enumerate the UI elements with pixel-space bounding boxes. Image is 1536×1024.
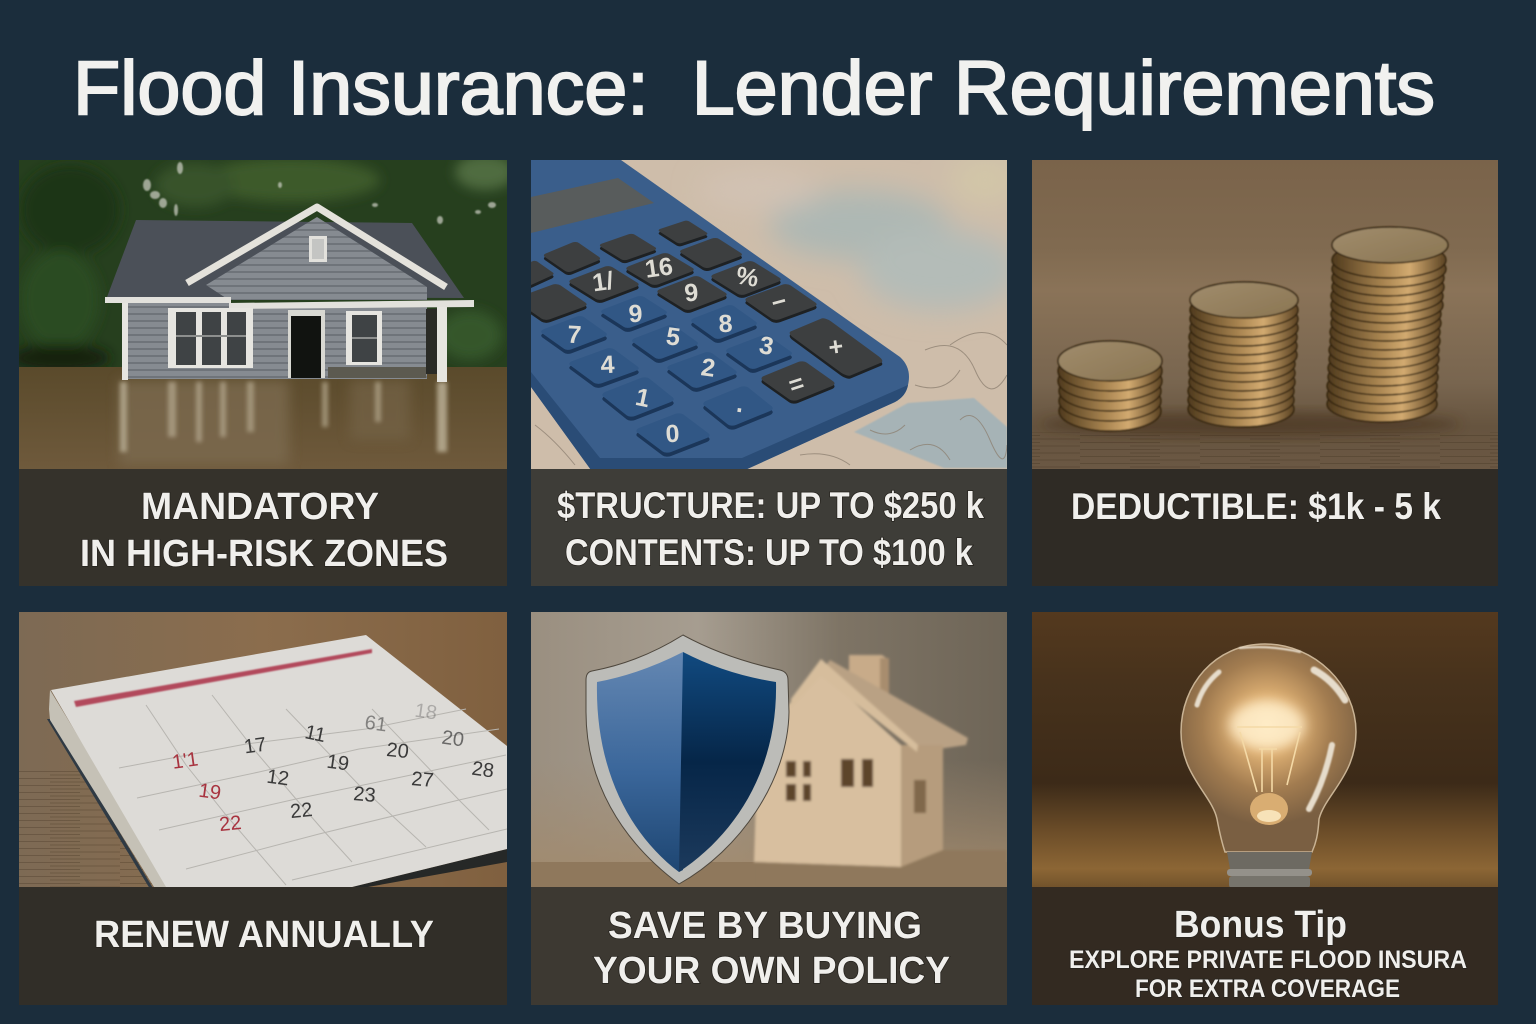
key labels: − [768,287,790,318]
caption text: YOUR OWN POLICY [593,950,950,992]
calendar dates: 17 [243,734,268,758]
key labels: 9 [628,300,643,328]
calculator display [531,178,654,233]
small coin stack [1058,341,1162,431]
icon: calendar [47,635,507,905]
key labels: % [734,261,761,293]
key labels: 8 [718,310,733,338]
panel: coverage limits [509,155,1020,586]
medium coin stack [1188,282,1298,427]
key labels: 2 [699,353,717,383]
panel: save by buying your own policy [531,612,1007,1005]
key labels: . [735,390,746,418]
caption text: RENEW ANNUALLY [94,914,434,956]
caption text: FOR EXTRA COVERAGE [1135,975,1400,1003]
calendar dates: 27 [410,768,435,792]
key labels: 0 [665,420,680,448]
calendar dates: 19 [197,780,222,804]
bulb screw base [1227,852,1312,888]
caption band [531,469,1007,586]
panel: renew annually [19,612,507,1005]
calendar dates: 11 [303,721,328,747]
panel: bonus tip [1032,612,1498,1005]
photo: warm background [1032,612,1498,888]
key labels: 7 [567,321,582,349]
calendar dates: 22 [289,799,314,823]
caption text: EXPLORE PRIVATE FLOOD INSURA [1069,946,1467,974]
caption text [592,910,951,984]
caption band [1032,887,1498,1005]
icon: house [105,207,474,382]
calendar grid [119,695,507,885]
icon: shield [586,635,789,884]
key labels: 4 [600,351,615,379]
calendar dates [171,700,495,836]
calendar dates: 18 [413,700,438,724]
calendar dates: 28 [470,758,495,782]
calendar dates: 22 [218,812,243,836]
photo: map background [531,155,1020,470]
photo: trees and flood water [10,154,515,470]
blue number keys [539,295,794,458]
panel: mandatory in high-risk zones [10,154,515,586]
caption band [531,887,1007,1005]
tall coin stack [1327,227,1448,422]
caption text: DEDUCTIBLE: $1k - 5 k [1071,486,1441,527]
dark function keys [509,220,885,405]
icon: light bulb [1181,644,1356,888]
key labels: = [785,369,808,400]
icon: coin stacks [1040,227,1460,436]
caption text: Bonus Tip [1174,904,1347,946]
caption text: IN HIGH-RISK ZONES [80,533,448,575]
caption text [557,485,984,573]
key labels: + [827,332,845,362]
key labels [567,252,845,448]
key labels: 5 [664,322,682,352]
calendar dates: 20 [385,739,410,763]
icon: calculator [509,160,909,470]
bulb highlights [1197,647,1345,809]
caption text: MANDATORY [141,486,379,528]
caption text: SAVE BY BUYING [608,905,922,947]
title: Flood Insurance: Lender Requirements [73,46,1435,131]
calendar header stripe [74,649,372,707]
key labels: 3 [757,331,776,361]
caption band [1032,469,1498,586]
calendar dates: 12 [265,766,290,790]
calendar dates: 1'1 [171,748,200,774]
photo: soft background and table [531,612,1007,888]
key labels: 1 [633,383,652,413]
calendar dates: 23 [352,783,377,807]
key labels: 16 [643,252,675,284]
key labels: 9 [683,278,699,308]
panel: deductible [1032,160,1498,586]
caption text: CONTENTS: UP TO $100 k [565,532,973,573]
caption text [82,492,448,568]
key labels: 1/ [591,267,615,297]
calendar dates: 61 [363,712,388,736]
filament [1237,727,1302,792]
photo: wood background [1032,160,1498,470]
caption band [19,469,507,586]
caption text [1069,904,1467,1003]
icon: wooden house [754,655,1007,888]
caption text: $TRUCTURE: UP TO $250 k [557,485,984,526]
calendar dates: 19 [325,751,350,775]
photo: wood desk [19,612,507,887]
caption band [19,887,507,1005]
calendar dates: 20 [440,727,465,751]
